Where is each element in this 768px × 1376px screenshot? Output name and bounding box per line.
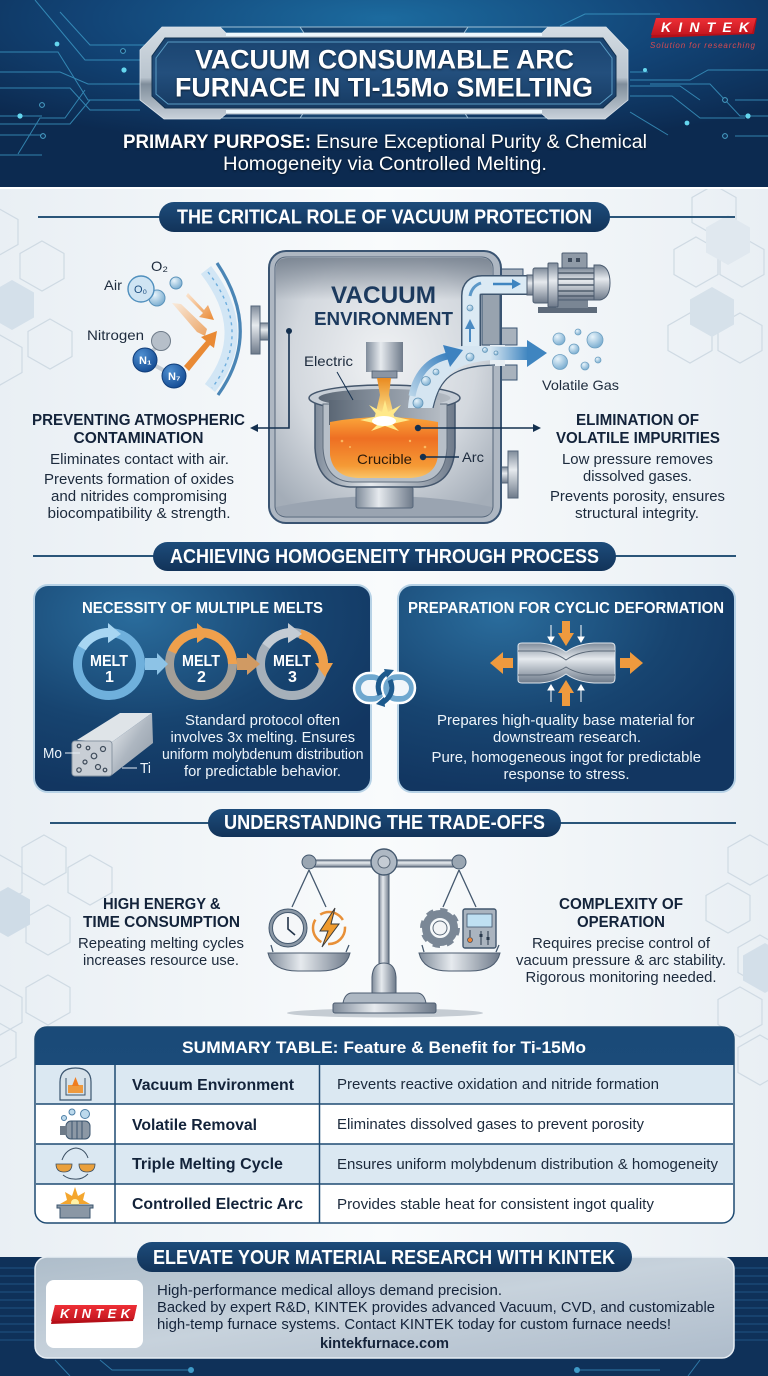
text block: preventing atmospheric contamination: biocompatibility & strength. [48, 506, 230, 522]
text block: complexity of operation: OPERATION [577, 914, 665, 931]
section heading: trade-offs: UNDERSTANDING THE TRADE-OFFS [224, 812, 545, 834]
row: volatile removal: Volatile Removal [132, 1117, 257, 1134]
icon: control panel [463, 909, 496, 948]
section heading: elevate your research: ELEVATE YOUR MATERIAL RESEARCH WITH KINTEK [153, 1247, 615, 1269]
icon: clock [269, 909, 307, 947]
text block: high energy and time consumption: Repeating melting cycles [78, 936, 244, 952]
row: volatile removal: Eliminates dissolved gases to prevent porosity [337, 1117, 645, 1133]
call to action card: Backed by expert R&D, KINTEK provides advanced Vacuum, CVD, and customizable [157, 1299, 715, 1316]
melt cycle rings: MELT [90, 653, 128, 670]
header banner [0, 0, 768, 189]
deformed specimen with force arrows [490, 621, 643, 706]
ingot illustration: Ti [140, 761, 151, 777]
icon: air and nitrogen molecules with orange arrows: Nitrogen [87, 327, 144, 343]
text: vacuum environment [314, 282, 453, 329]
text: vacuum environment: ENVIRONMENT [314, 309, 453, 329]
icon: volatile gas bubbles: Volatile Gas [542, 377, 619, 393]
text block: preventing atmospheric contamination: and nitrides compromising [51, 489, 227, 505]
text block: preventing atmospheric contamination: CONTAMINATION [74, 430, 204, 447]
text block: elimination of volatile impurities: ELIMINATION OF [576, 412, 699, 429]
footer band [0, 1257, 768, 1376]
balance scale illustration [268, 849, 500, 1018]
brand logo top right: KINTEK [661, 19, 750, 35]
melt cycle rings: 2 [197, 669, 206, 686]
furnace vessel diagram [250, 251, 547, 523]
furnace vessel diagram: Arc [462, 449, 484, 465]
panel: necessity of multiple melts: Standard protocol often [185, 713, 340, 729]
melt cycle rings: 3 [288, 669, 297, 686]
furnace vessel diagram: Electric [304, 353, 353, 369]
text block: elimination of volatile impurities [550, 412, 725, 522]
panel: necessity of multiple melts: involves 3x melting. Ensures [170, 730, 355, 746]
row: vacuum environment [60, 1068, 659, 1100]
panel: preparation for cyclic deformation: Prepares high-quality base material for [437, 713, 695, 729]
primary purpose statement: Homogeneity via Controlled Melting. [223, 154, 547, 175]
melt cycle rings: MELT [182, 653, 220, 670]
panel: necessity of multiple melts: NECESSITY OF MULTIPLE MELTS [82, 600, 323, 617]
section heading: elevate your research [137, 1242, 632, 1272]
text block: high energy and time consumption: HIGH ENERGY & [103, 896, 220, 913]
section heading: trade-offs [50, 809, 736, 837]
summary table [35, 1027, 734, 1223]
text block: elimination of volatile impurities: dissolved gases. [583, 469, 692, 485]
row: triple melting cycle: Triple Melting Cycle [132, 1156, 283, 1173]
text block: complexity of operation: vacuum pressure & arc stability. [516, 953, 726, 969]
text block: high energy and time consumption: TIME CONSUMPTION [83, 914, 240, 931]
icon: gear [422, 910, 458, 946]
primary purpose statement [123, 132, 647, 175]
call to action card: kintekfurnace.com [320, 1335, 449, 1352]
ingot illustration [43, 713, 153, 777]
icon: vacuum pump [527, 253, 610, 313]
text block: elimination of volatile impurities: Low pressure removes [562, 452, 713, 468]
text block: elimination of volatile impurities: structural integrity. [575, 506, 699, 522]
text block: high energy and time consumption: increases resource use. [83, 953, 239, 969]
icon: air and nitrogen molecules with orange arrows: O₀ [134, 284, 147, 296]
furnace vessel diagram: Crucible [357, 451, 412, 467]
title plate [140, 27, 628, 119]
icon: air and nitrogen molecules with orange arrows [87, 258, 217, 388]
panel: necessity of multiple melts: for predictable behavior. [184, 764, 341, 780]
icon: energy bolt [313, 908, 345, 947]
panel: preparation for cyclic deformation: PREPARATION FOR CYCLIC DEFORMATION [408, 600, 724, 617]
row: controlled electric arc: Controlled Electric Arc [132, 1196, 303, 1213]
call to action card: high-temp furnace systems. Contact KINTEK today for custom furnace needs! [157, 1316, 671, 1333]
brand logo top right: Solution for researching [650, 41, 756, 50]
text block: elimination of volatile impurities: VOLATILE IMPURITIES [556, 430, 720, 447]
volatile gas tube and stream [408, 279, 547, 408]
row: triple melting cycle: Ensures uniform molybdenum distribution & homogeneity [337, 1157, 719, 1173]
section heading: vacuum protection [38, 202, 735, 232]
row: controlled electric arc: Provides stable heat for consistent ingot quality [337, 1197, 655, 1213]
panel: preparation for cyclic deformation: response to stress. [504, 767, 630, 783]
text block: complexity of operation: COMPLEXITY OF [559, 896, 683, 913]
row: controlled electric arc [57, 1187, 655, 1218]
call to action card [35, 1257, 734, 1358]
logo tile [46, 1280, 143, 1348]
row: vacuum environment: Prevents reactive oxidation and nitride formation [337, 1077, 659, 1093]
title plate: FURNACE IN TI-15Mo SMELTING [175, 72, 593, 102]
panel: preparation for cyclic deformation [398, 585, 735, 792]
logo tile: KINTEK [60, 1306, 132, 1321]
text block: complexity of operation: Rigorous monitoring needed. [526, 970, 716, 986]
text block: preventing atmospheric contamination: PREVENTING ATMOSPHERIC [32, 412, 245, 429]
text block: elimination of volatile impurities: Prevents porosity, ensures [550, 489, 725, 505]
panel: necessity of multiple melts: uniform molybdenum distribution [162, 747, 364, 763]
callout dots and lines [250, 328, 541, 460]
melt cycle rings [78, 623, 333, 696]
call to action card: High-performance medical alloys demand precision. [157, 1282, 502, 1299]
title plate: VACUUM CONSUMABLE ARC [195, 44, 574, 74]
text block: complexity of operation: Requires precise control of [532, 936, 711, 952]
section heading: vacuum protection: THE CRITICAL ROLE OF VACUUM PROTECTION [177, 206, 592, 228]
text: vacuum environment: VACUUM [331, 282, 436, 309]
primary purpose statement: PRIMARY PURPOSE: [123, 132, 311, 153]
electrode and arc [360, 342, 410, 431]
text block: preventing atmospheric contamination [32, 412, 245, 522]
icon: protective shield arc [206, 263, 240, 395]
panel: necessity of multiple melts [34, 585, 371, 792]
text block: complexity of operation [516, 896, 726, 986]
ingot illustration: Mo [43, 746, 62, 762]
icon: linked chain cycle [354, 669, 415, 707]
panel: preparation for cyclic deformation: Pure, homogeneous ingot for predictable [432, 750, 701, 766]
icon: air and nitrogen molecules with orange arrows: N₇ [168, 371, 180, 383]
icon: air and nitrogen molecules with orange arrows: Air [104, 277, 122, 293]
crucible with molten metal [309, 385, 460, 508]
text block: preventing atmospheric contamination: Eliminates contact with air. [50, 452, 229, 468]
icon: volatile gas bubbles [542, 329, 619, 393]
melt cycle rings: MELT [273, 653, 311, 670]
text block: high energy and time consumption [78, 896, 244, 969]
section heading: homogeneity [33, 542, 736, 571]
table title: SUMMARY TABLE: Feature & Benefit for Ti-15Mo [182, 1038, 586, 1057]
text block: preventing atmospheric contamination: Prevents formation of oxides [44, 472, 234, 488]
icon: air and nitrogen molecules with orange arrows: N₁ [139, 355, 152, 367]
melt cycle rings: 1 [105, 669, 114, 686]
row: vacuum environment: Vacuum Environment [132, 1077, 295, 1094]
icon: air and nitrogen molecules with orange arrows: O₂ [151, 258, 168, 274]
primary purpose statement: Ensure Exceptional Purity & Chemical [316, 132, 647, 153]
row: triple melting cycle [56, 1148, 719, 1179]
section heading: homogeneity: ACHIEVING HOMOGENEITY THROUGH PROCESS [170, 546, 599, 568]
brand logo top right [650, 18, 757, 50]
panel: preparation for cyclic deformation: downstream research. [493, 730, 641, 746]
row: volatile removal [60, 1109, 645, 1139]
